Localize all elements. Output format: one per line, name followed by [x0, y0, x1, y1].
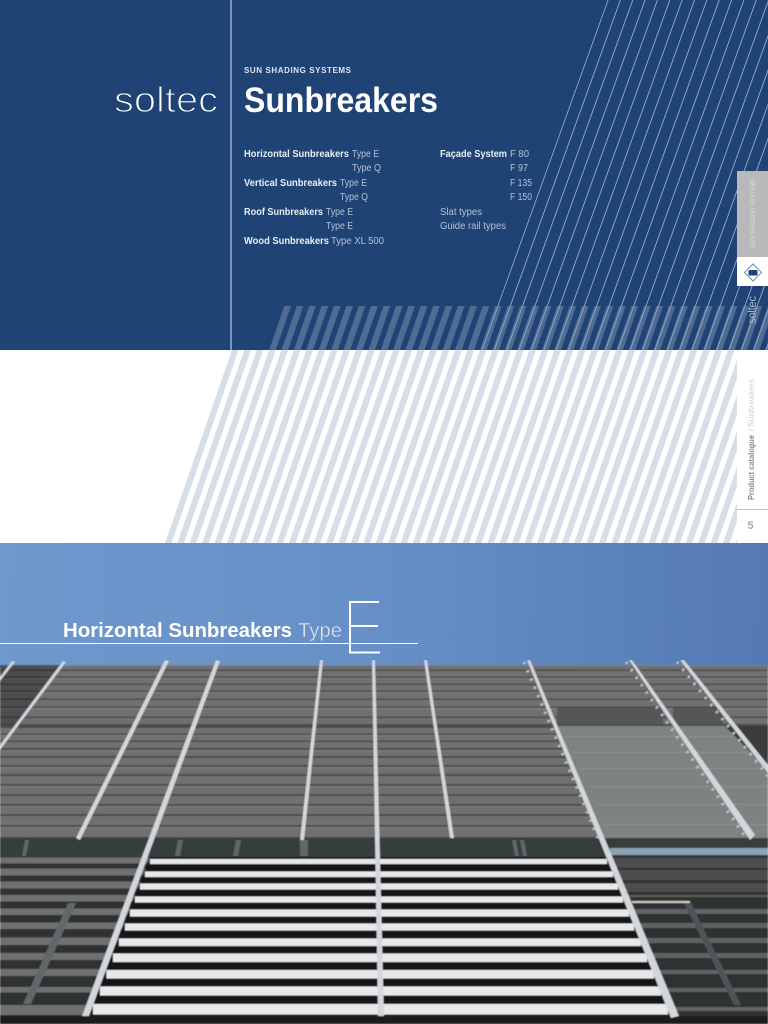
tab: sun shading systems: [737, 171, 768, 257]
list: sunbreaker types: Type Q: [340, 192, 368, 203]
diagonal thin lines: [482, 0, 768, 350]
page number: 5: [748, 520, 754, 532]
photo: building facade: [0, 543, 768, 1024]
panel: white striped band: [0, 350, 768, 543]
large letter E: [350, 602, 380, 652]
list: sunbreaker types: Type E: [326, 207, 353, 218]
side tab: [737, 171, 768, 543]
logo: soltec: soltec: [114, 79, 218, 120]
running title: product catalogue: /: [747, 428, 756, 431]
base band: [0, 838, 768, 858]
heading: Horizontal Sunbreakers Type E: Type: [298, 620, 342, 642]
lower left diagonal strut: [23, 903, 76, 1004]
white slats: [93, 859, 668, 1014]
heading rule: [0, 643, 418, 644]
side logo: soltec: soltec: [745, 296, 759, 324]
tab: sun shading systems: SUN SHADING SYSTEMS: [750, 178, 757, 248]
list: sunbreaker types: Vertical Sunbreakers: [244, 178, 337, 189]
list: facade systems: F 150: [510, 192, 532, 203]
mullion clip teeth: [524, 662, 768, 838]
shaded slat strip: [557, 708, 723, 724]
eyebrow: sun shading systems: SUN SHADING SYSTEMS: [244, 66, 352, 75]
list: sunbreaker types: [244, 149, 384, 247]
running title: product catalogue: Sunbreakers: [747, 379, 756, 427]
list: sunbreaker types: Horizontal Sunbreakers: [244, 149, 349, 160]
list: sunbreaker types: Wood Sunbreakers: [244, 236, 329, 247]
list: sunbreaker types: Type E: [352, 149, 379, 160]
running title: product catalogue: Product catalogue: [747, 434, 756, 500]
list: facade systems: [440, 149, 532, 232]
running title: product catalogue: [747, 379, 756, 500]
dark right slats: [725, 726, 768, 770]
lower dark background: [0, 857, 768, 1024]
striped band on blue: [266, 306, 768, 350]
lower left slats: [0, 858, 160, 1015]
flat grey panel: [558, 726, 768, 848]
vertical divider line: [230, 0, 232, 350]
list: facade systems: F 80: [510, 149, 529, 160]
list: sunbreaker types: Roof Sunbreakers: [244, 207, 323, 218]
list: facade systems: Façade System: [440, 149, 507, 160]
heading: Horizontal Sunbreakers Type E: Horizontal Sunbreakers: [63, 620, 292, 642]
panel: page tab: [737, 350, 768, 543]
title: Sunbreakers: Sunbreakers: [244, 81, 438, 120]
list: sunbreaker types: Type XL 500: [331, 236, 384, 247]
panel: blue header: [0, 0, 768, 350]
heading: Horizontal Sunbreakers Type E: [0, 602, 418, 652]
list: facade systems: F 97: [510, 163, 528, 174]
metal mullions: [0, 660, 768, 1018]
white slat bay: [88, 857, 672, 1016]
slat highlights: [0, 665, 768, 828]
icon: diamond: [737, 257, 768, 286]
list: sunbreaker types: Type E: [340, 178, 367, 189]
lower right diagonal strut: [684, 903, 741, 1005]
list: facade systems: Guide rail types: [440, 221, 506, 232]
facade drawing: [0, 660, 768, 1024]
list: sunbreaker types: Type Q: [352, 163, 381, 174]
list: sunbreaker types: Type E: [326, 221, 353, 232]
list: facade systems: F 135: [510, 178, 532, 189]
dark left slats: [0, 665, 62, 725]
sky: [0, 543, 768, 668]
upper slats: [0, 665, 768, 837]
lower right slats: [600, 858, 768, 892]
light diagonal stripes: [165, 350, 737, 543]
list: facade systems: Slat types: [440, 207, 482, 218]
light window strip: [610, 848, 768, 855]
